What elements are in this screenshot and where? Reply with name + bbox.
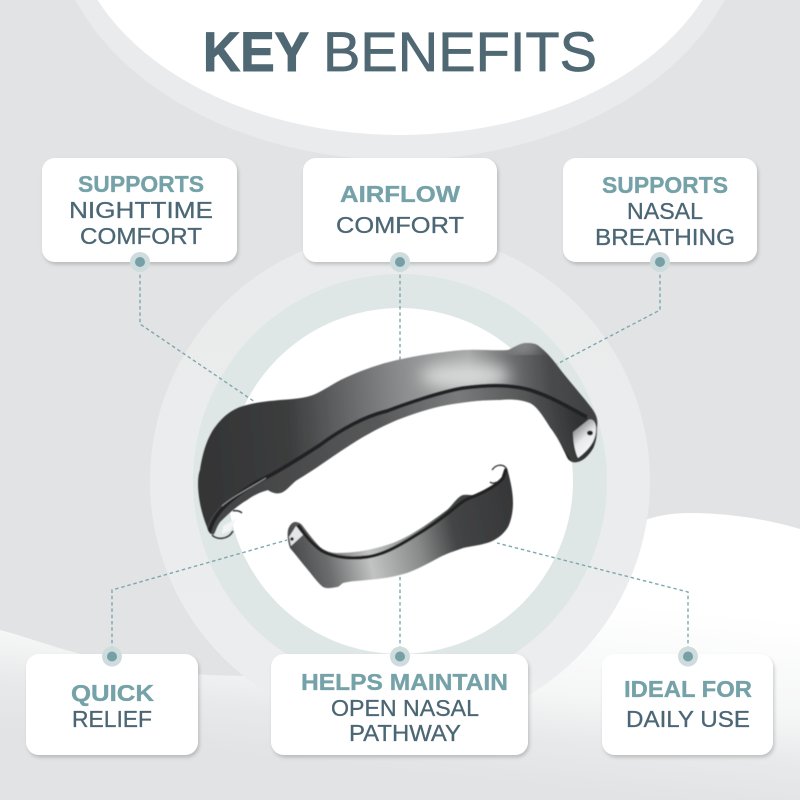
card: quick relief: QUICK [71,680,154,706]
strap under band [207,386,600,545]
small strap rim [298,469,506,558]
strap tip hole [587,431,593,435]
strap white clip and hook [212,511,242,538]
connector lines [112,262,688,656]
concentric circles [150,231,650,731]
card: helps maintain open nasal pathway [271,654,528,755]
dark edge lower right [549,427,569,460]
small strap hook [490,465,506,483]
card: ideal for daily use [602,654,773,755]
background hill [0,513,800,800]
card: airflow comfort [303,158,497,262]
card: helps maintain open nasal pathway: OPEN NASAL [331,695,479,721]
card: supports nighttime comfort: NIGHTTIME [69,197,213,223]
header ellipse [52,0,748,160]
card: helps maintain open nasal pathway: HELPS MAINTAIN [301,669,508,695]
card: airflow comfort: COMFORT [336,212,464,238]
card: helps maintain open nasal pathway: PATHWAY [349,720,461,746]
card: quick relief [26,654,198,755]
card: supports nighttime comfort: SUPPORTS [78,171,204,197]
title: BENEFITS [323,20,597,83]
connector dots [102,252,698,666]
strap rim [209,386,587,533]
card: supports nasal breathing: SUPPORTS [602,172,728,198]
card: supports nighttime comfort: COMFORT [80,223,202,249]
strap silver tip [573,419,596,458]
title: KEY [203,20,309,83]
card: supports nasal breathing [563,158,757,262]
title [203,20,597,83]
card: quick relief: RELIEF [72,706,152,732]
card: airflow comfort: AIRFLOW [340,181,461,207]
device: large strap [190,335,605,545]
card: ideal for daily use: IDEAL FOR [624,676,752,702]
rim highlight [222,478,266,506]
small strap tip [289,526,303,546]
card: supports nighttime comfort [42,158,237,262]
device: small strap [288,465,513,588]
card: ideal for daily use: DAILY USE [626,706,750,732]
card: supports nasal breathing: NASAL [627,198,703,224]
card: supports nasal breathing: BREATHING [595,224,735,250]
small strap tip hole [290,537,294,541]
